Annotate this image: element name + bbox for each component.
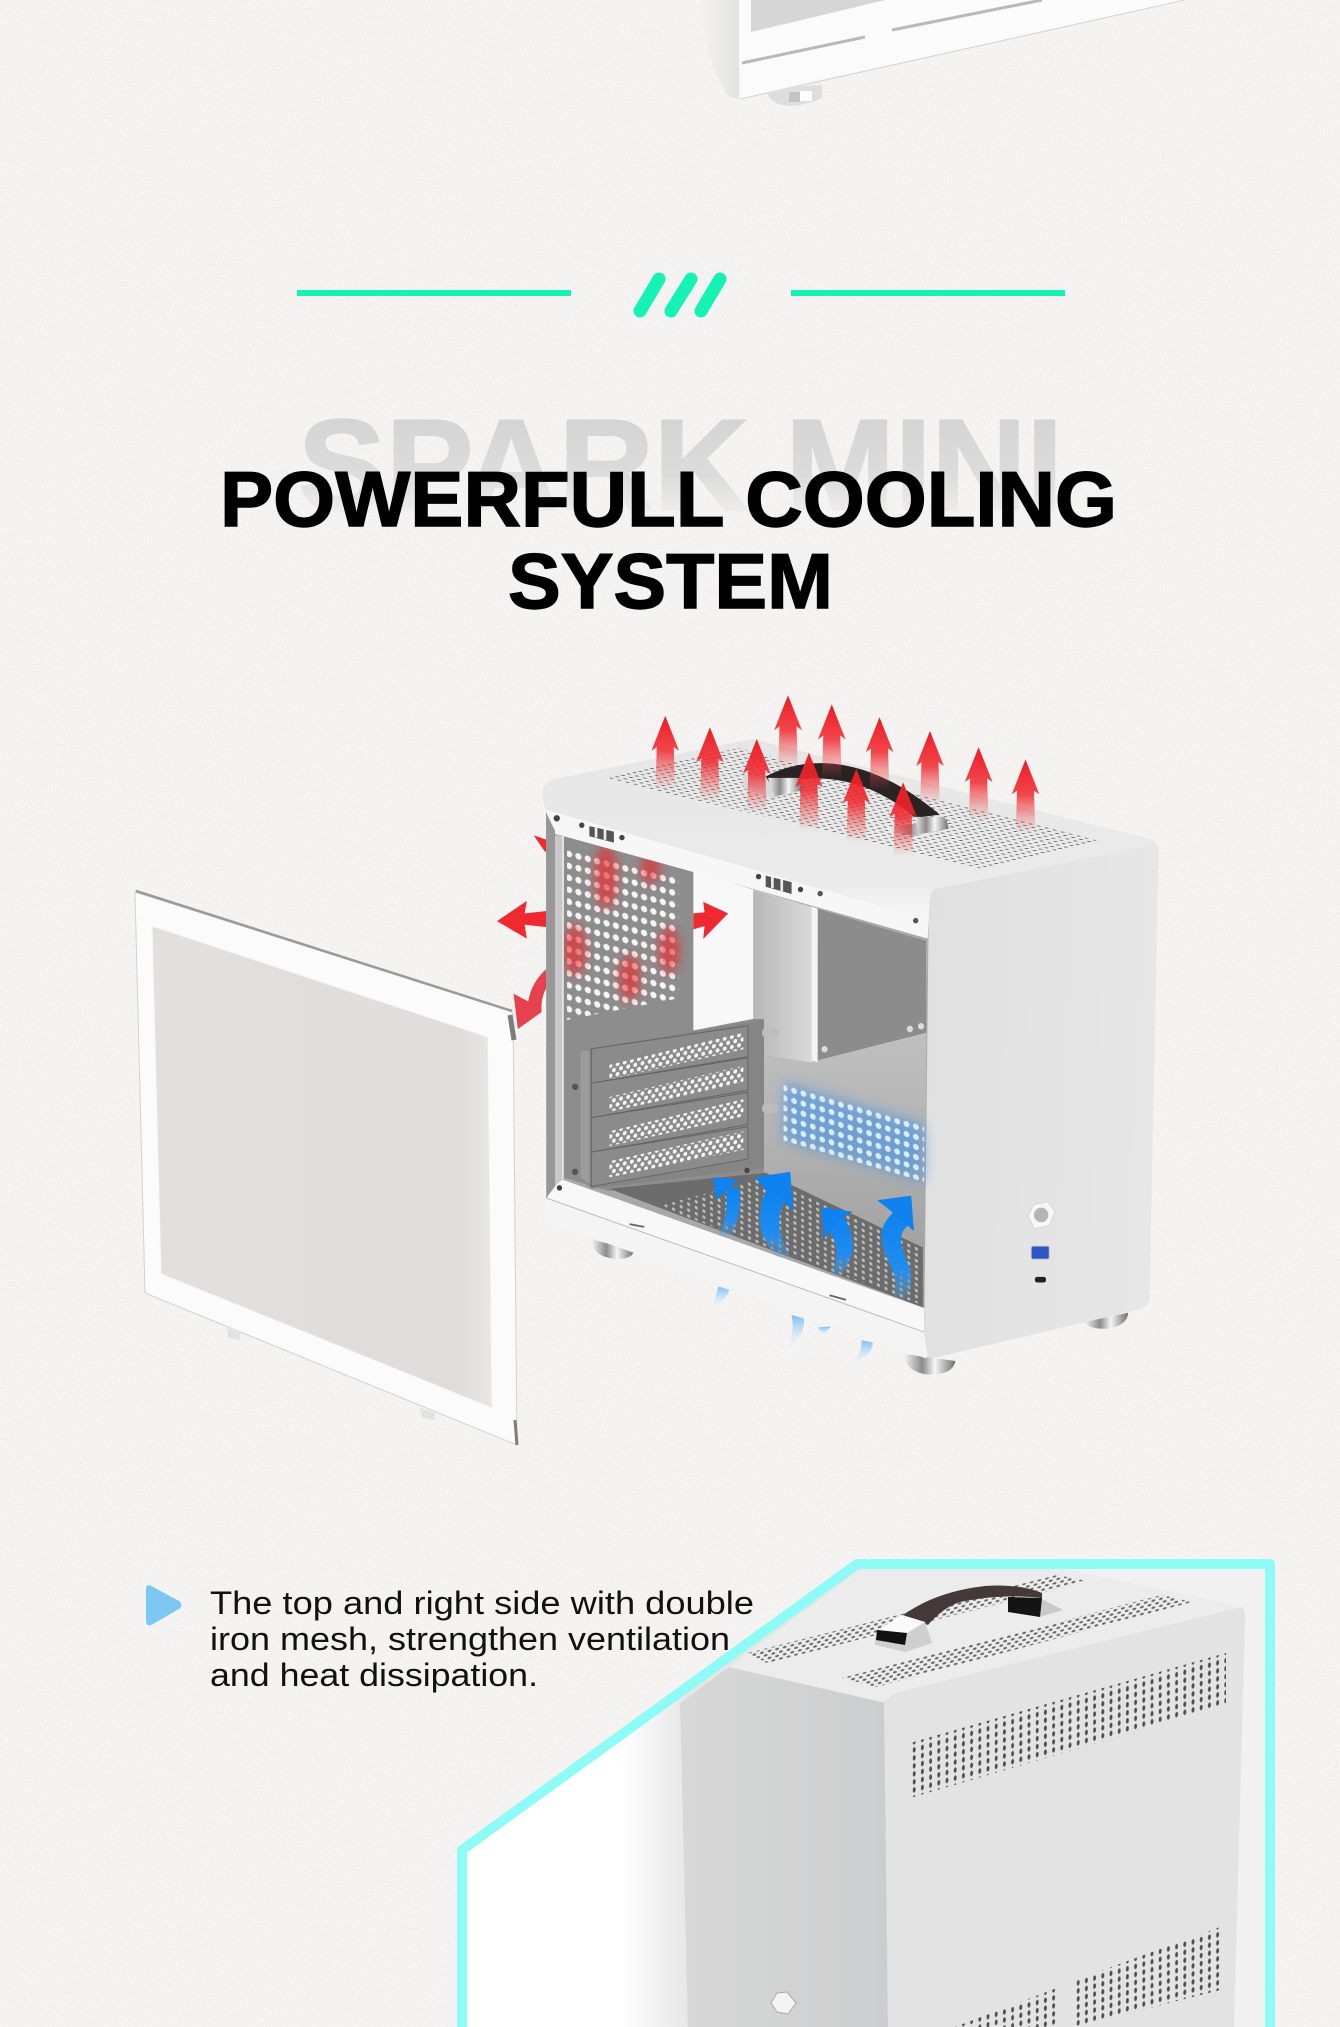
case floor mesh — [609, 1173, 923, 1307]
red heat glow on rear panel — [563, 844, 680, 1001]
case top face — [885, 1696, 890, 1700]
description text — [210, 1585, 754, 1693]
left vertical frame — [546, 812, 564, 1197]
detail photo: case rear view in cyan frame — [462, 1564, 1270, 2027]
bullet arrow icon — [146, 1585, 182, 1625]
front I/O: power button and ports — [1028, 1202, 1055, 1282]
case interior base — [546, 812, 929, 1332]
front lower frame — [546, 1177, 926, 1359]
title: POWERFULL COOLING — [220, 455, 1117, 543]
cooling diagram: open case with airflow — [497, 695, 1159, 1375]
blue cool air on side mesh — [784, 1082, 924, 1182]
title: SYSTEM — [508, 537, 833, 625]
far wall — [753, 889, 927, 1308]
product photo: cropped case bottom at top of page — [700, 0, 1190, 106]
case left face — [680, 1667, 888, 2027]
rear mesh upper — [910, 1653, 1226, 1798]
ghost heading: SPARK MINI: SPARK MINI — [298, 392, 1063, 538]
carry handle — [743, 763, 949, 836]
frame fill — [462, 1564, 1270, 2027]
case rear face — [884, 1607, 1245, 2027]
clipped case view — [680, 1564, 1270, 2027]
blue intake streams beneath case — [712, 1287, 873, 1362]
red exhaust arrow through window — [693, 902, 728, 939]
top mesh strips — [748, 1575, 1192, 1687]
rear mesh lower — [955, 1927, 1220, 2027]
handle — [875, 1585, 1063, 1652]
rubber feet — [592, 1239, 1128, 1375]
front upper frame — [547, 810, 929, 939]
description text: iron mesh, strengthen ventilation — [210, 1621, 730, 1657]
rear window cutout — [693, 871, 753, 1030]
detached side glass panel — [135, 891, 517, 1445]
light column — [753, 890, 813, 1063]
top mesh — [605, 748, 1098, 868]
section divider: green lines and slashes — [297, 279, 1065, 311]
power supply bracket — [812, 906, 926, 1063]
description text: and heat dissipation. — [210, 1657, 538, 1693]
case right side face — [924, 844, 1159, 1359]
blue intake arrows inside case — [713, 1172, 914, 1299]
red exhaust arrows above case — [651, 695, 1039, 856]
power button — [771, 1992, 796, 2014]
expansion slot brackets — [572, 1020, 779, 1189]
red exhaust arrows left of case — [497, 835, 554, 1029]
cyan frame outline — [462, 1564, 1270, 2027]
rear panel — [563, 836, 764, 1191]
title — [220, 455, 1117, 625]
case top face with handle mounts — [542, 739, 1156, 920]
description text: The top and right side with double — [210, 1585, 754, 1621]
rear panel perforation — [567, 847, 679, 1020]
